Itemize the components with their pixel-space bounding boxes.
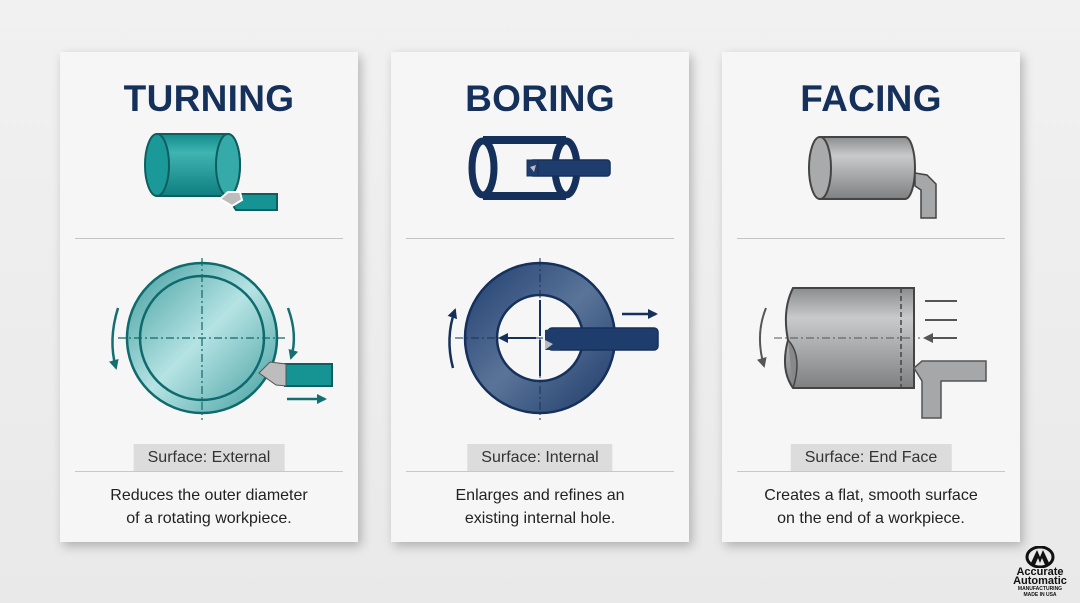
icon: boring ring	[449, 258, 658, 420]
icon: facing workpiece	[760, 288, 986, 418]
label: surface internal: Surface: Internal	[481, 449, 599, 466]
text: turning description: Reduces the outer diameter	[110, 487, 308, 504]
text: turning description	[110, 487, 308, 527]
heading: turning: TURNING	[124, 78, 294, 119]
illustration: facing	[757, 136, 987, 419]
text: boring description	[456, 487, 624, 527]
logo: Accurate	[1016, 566, 1064, 578]
logo: MANUFACTURING	[1018, 586, 1062, 592]
text: turning description: of a rotating workpiece.	[126, 510, 292, 527]
label: surface external: Surface: External	[148, 449, 270, 466]
logo: Automatic	[1013, 575, 1067, 587]
icon: facing cylinder	[809, 137, 936, 218]
logo: MADE IN USA	[1023, 592, 1057, 598]
heading: boring: BORING	[465, 78, 615, 119]
panel: facing	[722, 52, 1020, 542]
panel: turning	[60, 52, 358, 542]
icon: logo mark	[1026, 546, 1054, 568]
panel: boring	[391, 52, 689, 542]
label: surface end face: Surface: End Face	[805, 449, 937, 466]
text: boring description: existing internal hole.	[465, 510, 615, 527]
label: surface internal	[467, 444, 613, 471]
illustration: boring	[448, 136, 659, 420]
icon: boring tube	[472, 140, 610, 196]
text: boring description: Enlarges and refines an	[456, 487, 624, 504]
logo	[1013, 546, 1067, 598]
illustration: turning	[109, 133, 333, 420]
icon: turning cylinder	[145, 134, 277, 210]
text: facing description: Creates a flat, smooth surface	[764, 487, 978, 504]
text: facing description: on the end of a workpiece.	[777, 510, 965, 527]
icon: turning cross-section	[112, 258, 332, 420]
label: surface end face	[791, 444, 951, 471]
heading: facing: FACING	[800, 78, 942, 119]
text: facing description	[764, 487, 978, 527]
label: surface external	[134, 444, 284, 471]
